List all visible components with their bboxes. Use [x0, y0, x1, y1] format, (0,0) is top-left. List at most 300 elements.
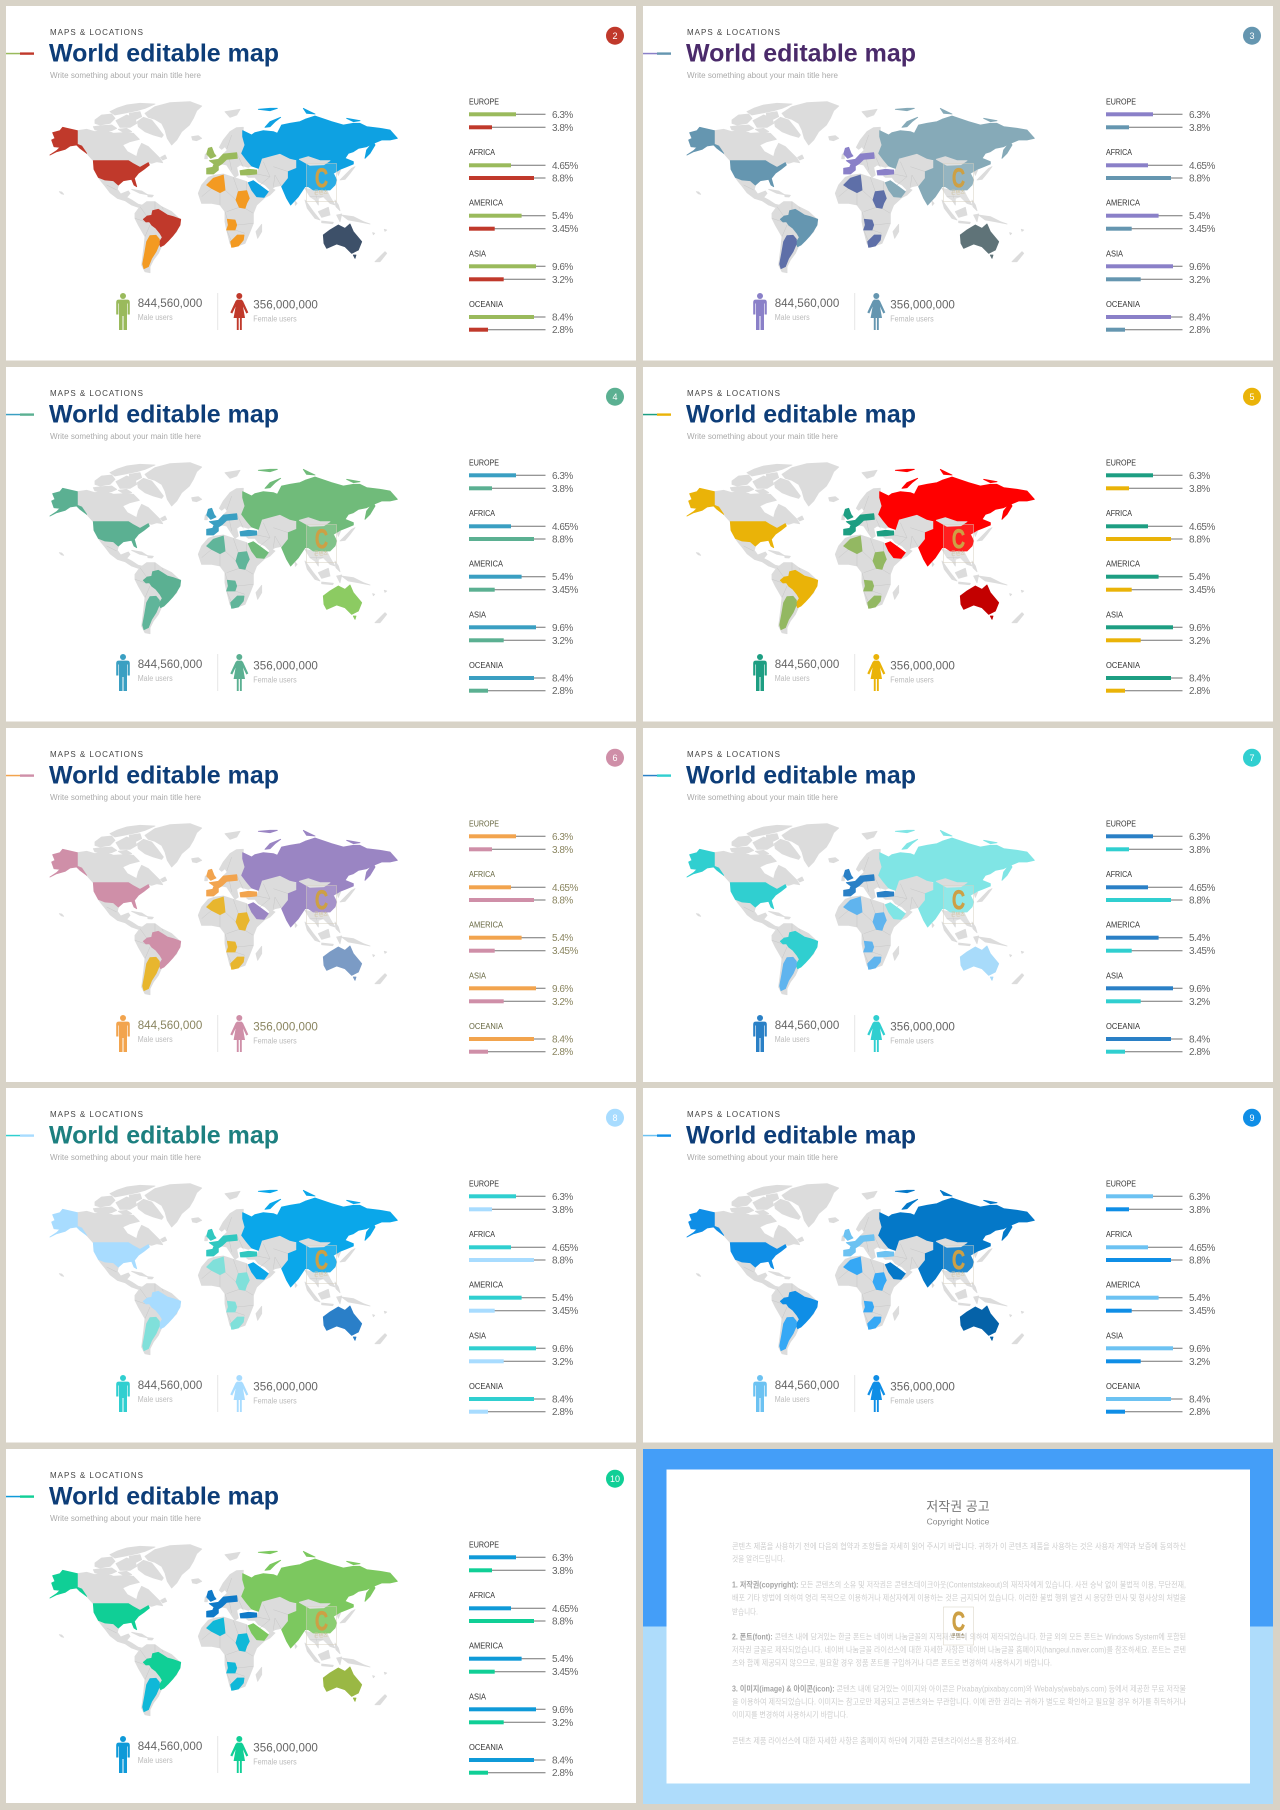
- male stat: 844,560,000: [138, 1018, 203, 1032]
- legend: Oceania: 8.4%: [1189, 312, 1210, 324]
- legend: Asia: 9.6%: [552, 623, 573, 634]
- legend: America: 5.4%: [1189, 1293, 1210, 1304]
- legend: America: 3.45%: [1189, 224, 1215, 235]
- legend: Europe: EUROPE: [469, 1180, 499, 1188]
- world map: [687, 102, 1034, 273]
- legend: Europe: 6.3%: [552, 1552, 573, 1563]
- legend: America: 3.45%: [1189, 1306, 1215, 1317]
- page badge: 6: [612, 752, 618, 762]
- page badge: 3: [1249, 31, 1255, 41]
- panel: copyright notice: [643, 1449, 1273, 1804]
- page badge: 7: [1249, 752, 1255, 762]
- legend: Africa: AFRICA: [469, 870, 496, 879]
- legend: Oceania: 2.8%: [1189, 325, 1210, 336]
- male stat: Male users: [775, 313, 810, 322]
- world map: [50, 1184, 397, 1355]
- title: World editable map: [49, 401, 279, 429]
- kicker: MAPS & LOCATIONS: [50, 28, 143, 37]
- female stat: 356,000,000: [253, 1740, 318, 1754]
- legend: America: [1106, 199, 1215, 235]
- male stat: 844,560,000: [138, 1738, 203, 1752]
- watermark: 콘텐츠: [314, 550, 328, 557]
- watermark: [306, 163, 336, 202]
- legend: Asia: 9.6%: [1189, 983, 1210, 994]
- legend: Africa: [469, 1230, 578, 1266]
- legend: Asia: ASIA: [469, 1331, 487, 1340]
- watermark: C: [952, 884, 965, 914]
- subtitle: Write something about your main title here: [687, 71, 839, 80]
- legend: Oceania: 8.4%: [1189, 1394, 1210, 1406]
- male stat: 844,560,000: [138, 296, 203, 310]
- female stat: Female users: [253, 675, 297, 684]
- female stat: 356,000,000: [890, 658, 955, 672]
- watermark: C: [952, 1606, 965, 1636]
- legend: Oceania: 8.4%: [552, 1394, 573, 1406]
- legend: Oceania: 2.8%: [1189, 1047, 1210, 1058]
- legend: Asia: [1106, 1331, 1210, 1368]
- legend: Europe: 3.8%: [552, 1205, 573, 1216]
- legend: Oceania: [469, 1382, 573, 1418]
- legend: Oceania: [469, 1021, 573, 1058]
- page badge: [606, 748, 624, 766]
- male stat: [753, 654, 840, 691]
- legend: America: [469, 560, 578, 596]
- watermark: C: [315, 884, 328, 914]
- legend: Africa: 8.8%: [1189, 895, 1210, 906]
- panel: slide 2: [6, 6, 636, 360]
- watermark: C: [952, 524, 965, 554]
- legend: Asia: [1106, 249, 1210, 286]
- page badge: 10: [610, 1473, 620, 1483]
- legend: Europe: 3.8%: [1189, 844, 1210, 855]
- legend: Africa: 4.65%: [552, 522, 578, 533]
- accent line: [6, 52, 34, 55]
- male stat: [753, 1375, 840, 1412]
- legend: America: [1106, 1281, 1215, 1317]
- watermark: 콘텐츠: [314, 189, 328, 196]
- panel: slide 4: [6, 367, 636, 722]
- accent line: [6, 774, 34, 776]
- stat divider: [217, 1014, 218, 1052]
- legend: Asia: 9.6%: [552, 1344, 573, 1355]
- legend: America: 5.4%: [1189, 572, 1210, 583]
- legend: Oceania: [469, 661, 573, 697]
- legend: Oceania: 2.8%: [1189, 1407, 1210, 1418]
- legend: Oceania: [1106, 1382, 1210, 1418]
- legend: Africa: 4.65%: [552, 1603, 578, 1614]
- legend: Asia: [1106, 610, 1210, 647]
- legend: Oceania: [1106, 1021, 1210, 1058]
- legend: Oceania: [1106, 661, 1210, 697]
- watermark: C: [315, 1245, 328, 1275]
- copyright subheading: Copyright Notice: [927, 1516, 990, 1526]
- legend: Europe: 3.8%: [552, 1565, 573, 1576]
- legend: Africa: [469, 509, 578, 546]
- legend: Asia: ASIA: [469, 610, 487, 619]
- legend: Africa: AFRICA: [469, 148, 496, 157]
- legend: America: AMERICA: [1106, 920, 1141, 929]
- male stat: Male users: [138, 674, 173, 683]
- legend: Africa: [1106, 509, 1215, 546]
- kicker: MAPS & LOCATIONS: [50, 1470, 143, 1480]
- legend: Europe: EUROPE: [1106, 1180, 1136, 1188]
- legend: Oceania: 2.8%: [552, 325, 573, 336]
- page badge: [1243, 388, 1261, 406]
- legend: Asia: [469, 971, 573, 1007]
- legend: America: 5.4%: [552, 1654, 573, 1665]
- watermark: C: [315, 1606, 328, 1636]
- legend: Africa: [1106, 1230, 1215, 1266]
- legend: Europe: [1106, 98, 1210, 134]
- legend: Africa: 8.8%: [552, 1616, 573, 1627]
- male stat: 844,560,000: [138, 1378, 203, 1392]
- copyright body: 콘텐츠 제품 라이선스에 대한 자세한 사항은 홈페이지 하단에 기재한 콘텐츠라이선스를 참조하세요.: [732, 1735, 1019, 1745]
- stat divider: [854, 654, 855, 691]
- female stat: [230, 654, 318, 691]
- legend: America: 3.45%: [552, 1667, 578, 1678]
- accent line: [643, 774, 671, 776]
- legend: Africa: [1106, 870, 1215, 906]
- legend: Oceania: OCEANIA: [1106, 1021, 1141, 1030]
- legend: [469, 1540, 578, 1779]
- watermark: C: [952, 1245, 965, 1275]
- legend: Europe: 3.8%: [1189, 1205, 1210, 1216]
- legend: Oceania: 8.4%: [552, 674, 573, 684]
- legend: Europe: EUROPE: [469, 819, 499, 828]
- legend: Africa: 4.65%: [1189, 522, 1215, 533]
- male stat: 844,560,000: [775, 1018, 840, 1032]
- legend: Asia: 3.2%: [1189, 1357, 1210, 1368]
- legend: Africa: 8.8%: [552, 1256, 573, 1266]
- accent line: [6, 413, 34, 416]
- legend: Asia: [469, 610, 573, 647]
- legend: Asia: 3.2%: [552, 275, 573, 286]
- copyright body: 콘텐츠 제품을 사용하기 전에 다음의 협약과 조항들을 자세히 읽어 주시기 바랍니다. 귀하가 이 콘텐츠 제품을 사용하는 것은 사용자 계약과 보증에 동의하신: [732, 1540, 1186, 1550]
- panel: slide 5: [643, 367, 1273, 722]
- copyright body: 2. 폰트(font): 콘텐츠 내에 담겨있는 한글 폰트는 네이버 나눔글꼴의 지적재산권에 의하여 제작되었습니다. 한글 외의 모든 폰트는 Windows System에 포함된: [732, 1631, 1186, 1641]
- female stat: Female users: [890, 1036, 934, 1045]
- legend: Africa: 4.65%: [1189, 161, 1215, 172]
- legend: [1106, 1180, 1215, 1418]
- legend: Oceania: OCEANIA: [469, 1742, 504, 1751]
- subtitle: Write something about your main title here: [50, 1153, 202, 1162]
- legend: Oceania: OCEANIA: [469, 661, 504, 670]
- legend: America: AMERICA: [1106, 1281, 1141, 1290]
- female stat: Female users: [253, 1396, 297, 1405]
- kicker: MAPS & LOCATIONS: [50, 389, 143, 398]
- watermark: [944, 884, 974, 923]
- male stat: Male users: [138, 1034, 173, 1044]
- legend: Oceania: OCEANIA: [1106, 300, 1141, 309]
- kicker: MAPS & LOCATIONS: [687, 750, 780, 758]
- legend: Oceania: 2.8%: [1189, 686, 1210, 697]
- panel: slide 9: [643, 1088, 1273, 1442]
- page badge: [1243, 27, 1261, 45]
- legend: Asia: ASIA: [1106, 1331, 1124, 1340]
- watermark: [306, 1606, 336, 1644]
- legend: Africa: 4.65%: [552, 882, 578, 893]
- legend: Europe: 6.3%: [1189, 1192, 1210, 1203]
- legend: Asia: 9.6%: [552, 1704, 573, 1715]
- female stat: Female users: [890, 1396, 934, 1405]
- watermark: [306, 884, 336, 923]
- legend: Asia: [1106, 971, 1210, 1007]
- copyright body: 츠와 함께 제공되지 않으므로, 필요할 경우 정품 폰트를 구입하거나 다른 폰트로 변경하여 사용하시기 바랍니다.: [732, 1657, 1052, 1667]
- male stat: Male users: [775, 1395, 810, 1404]
- watermark: [944, 1245, 974, 1284]
- legend: Europe: [469, 458, 573, 495]
- legend: Oceania: [1106, 300, 1210, 336]
- male stat: [116, 1736, 203, 1772]
- world map: [50, 1544, 397, 1715]
- kicker: MAPS & LOCATIONS: [50, 1110, 143, 1119]
- legend: Oceania: 2.8%: [552, 1407, 573, 1418]
- legend: Oceania: 2.8%: [552, 1768, 573, 1779]
- watermark: [306, 1245, 336, 1284]
- legend: Europe: 3.8%: [552, 123, 573, 134]
- watermark: 콘텐츠: [314, 1632, 328, 1638]
- legend: Europe: 3.8%: [1189, 123, 1210, 134]
- stat divider: [854, 1375, 855, 1412]
- legend: America: 3.45%: [552, 585, 578, 596]
- watermark: 콘텐츠: [951, 550, 965, 557]
- accent line: [643, 413, 671, 416]
- legend: Africa: AFRICA: [469, 509, 496, 518]
- legend: Asia: 3.2%: [1189, 996, 1210, 1007]
- legend: Europe: EUROPE: [469, 98, 499, 106]
- female stat: Female users: [253, 1036, 297, 1045]
- legend: Africa: 4.65%: [1189, 1243, 1215, 1254]
- legend: Oceania: 8.4%: [552, 312, 573, 324]
- stat divider: [217, 1736, 218, 1772]
- legend: America: 5.4%: [552, 211, 573, 222]
- watermark: [944, 524, 974, 562]
- legend: America: [1106, 920, 1215, 957]
- legend: America: AMERICA: [469, 1641, 504, 1650]
- female stat: [867, 654, 955, 691]
- watermark: [944, 1606, 974, 1644]
- legend: Asia: ASIA: [469, 249, 487, 258]
- legend: Oceania: 8.4%: [1189, 1034, 1210, 1045]
- legend: Oceania: OCEANIA: [1106, 1382, 1141, 1391]
- copyright body: 것을 알려드립니다.: [732, 1553, 785, 1563]
- legend: America: [469, 920, 578, 957]
- legend: America: [469, 1281, 578, 1317]
- female stat: 356,000,000: [890, 297, 955, 311]
- legend: America: [469, 1641, 578, 1678]
- legend: Africa: 4.65%: [1189, 882, 1215, 893]
- female stat: [230, 293, 318, 330]
- legend: Asia: ASIA: [469, 971, 487, 980]
- legend: Europe: [1106, 1180, 1210, 1216]
- legend: Europe: [469, 1180, 573, 1216]
- panel: slide 8: [6, 1088, 636, 1442]
- male stat: Male users: [138, 313, 173, 322]
- stat divider: [854, 1014, 855, 1052]
- world map: [50, 102, 397, 273]
- legend: America: AMERICA: [469, 199, 504, 208]
- legend: America: 5.4%: [1189, 211, 1210, 222]
- female stat: [230, 1375, 318, 1412]
- kicker: MAPS & LOCATIONS: [50, 750, 143, 758]
- panel: slide 10: [6, 1449, 636, 1803]
- legend: Africa: [1106, 148, 1215, 184]
- legend: Africa: 8.8%: [552, 895, 573, 906]
- legend: America: AMERICA: [1106, 560, 1141, 569]
- legend: [1106, 98, 1215, 336]
- legend: Europe: 6.3%: [1189, 110, 1210, 121]
- female stat: Female users: [253, 314, 297, 323]
- page badge: 2: [612, 31, 618, 41]
- legend: America: 3.45%: [552, 946, 578, 957]
- male stat: Male users: [138, 1756, 173, 1764]
- page badge: [1243, 748, 1261, 766]
- female stat: Female users: [890, 314, 934, 323]
- male stat: 844,560,000: [138, 657, 203, 671]
- female stat: 356,000,000: [253, 297, 318, 311]
- female stat: [230, 1736, 318, 1772]
- legend: [469, 819, 578, 1058]
- subtitle: Write something about your main title here: [687, 1153, 839, 1162]
- stat divider: [854, 293, 855, 330]
- male stat: [116, 1014, 203, 1052]
- legend: America: 3.45%: [1189, 946, 1215, 957]
- female stat: 356,000,000: [890, 1019, 955, 1033]
- legend: Asia: ASIA: [1106, 610, 1124, 619]
- legend: Oceania: OCEANIA: [469, 300, 504, 309]
- watermark: C: [315, 524, 328, 554]
- legend: Africa: [469, 870, 578, 906]
- copyright body: 저작권 글꼴로 제작되었습니다. 네이버 나눔글꼴 라이선스에 대한 자세한 사항은 네이버 나눔글꼴 홈페이지(hangeul.naver.com)를 참조하세요. 폰트는 콘텐: [732, 1644, 1186, 1654]
- legend: [469, 1180, 578, 1418]
- female stat: 356,000,000: [253, 1019, 318, 1033]
- male stat: [116, 1375, 203, 1412]
- legend: America: AMERICA: [469, 560, 504, 569]
- legend: Europe: EUROPE: [1106, 98, 1136, 106]
- legend: Europe: 6.3%: [552, 471, 573, 482]
- legend: Asia: 9.6%: [1189, 623, 1210, 634]
- title: World editable map: [686, 40, 916, 68]
- male stat: 844,560,000: [775, 296, 840, 310]
- copyright body: 3. 이미지(image) & 아이콘(icon): 콘텐츠 내에 담겨있는 이미지와 아이콘은 Pixabay(pixabay.com)와 Webalys(webalys.com) 등에서 제공한 무료 저작물: [732, 1683, 1186, 1693]
- watermark: 콘텐츠: [314, 910, 328, 918]
- legend: Europe: 6.3%: [552, 110, 573, 121]
- legend: America: 3.45%: [1189, 585, 1215, 596]
- male stat: 844,560,000: [775, 1378, 840, 1392]
- legend: Oceania: OCEANIA: [469, 1021, 504, 1030]
- copyright body: 받습니다.: [732, 1606, 758, 1616]
- legend: Oceania: OCEANIA: [1106, 661, 1141, 670]
- legend: Africa: [469, 1591, 578, 1627]
- female stat: 356,000,000: [253, 1379, 318, 1393]
- legend: America: AMERICA: [1106, 199, 1141, 208]
- page badge: 8: [612, 1113, 618, 1123]
- legend: Europe: EUROPE: [469, 458, 499, 468]
- female stat: [867, 1014, 955, 1052]
- legend: Oceania: [469, 300, 573, 336]
- copyright body: 1. 저작권(copyright): 모든 콘텐츠의 소유 및 저작권은 콘텐츠테이크아웃(Contentstakeout)의 재작자에게 있습니다. 사전 승낙 없이 불법적 이용, 무단전재,: [732, 1579, 1186, 1589]
- legend: Oceania: 8.4%: [552, 1755, 573, 1766]
- legend: America: 5.4%: [552, 572, 573, 583]
- legend: Oceania: 2.8%: [552, 686, 573, 697]
- legend: Europe: 6.3%: [552, 831, 573, 842]
- title: World editable map: [686, 401, 916, 429]
- watermark: 콘텐츠: [951, 1271, 965, 1278]
- panel: slide 6: [6, 728, 636, 1082]
- panel: slide 7: [643, 728, 1273, 1082]
- legend: Asia: 3.2%: [552, 1717, 573, 1728]
- legend: Africa: 8.8%: [1189, 174, 1210, 184]
- legend: America: AMERICA: [469, 920, 504, 929]
- watermark: [944, 163, 974, 202]
- subtitle: Write something about your main title here: [50, 1514, 202, 1522]
- legend: [1106, 819, 1215, 1058]
- page badge: [606, 388, 624, 406]
- legend: America: [469, 199, 578, 235]
- female stat: [230, 1014, 318, 1052]
- stat divider: [217, 654, 218, 691]
- accent line: [6, 1134, 34, 1137]
- subtitle: Write something about your main title here: [50, 792, 202, 802]
- title: World editable map: [49, 761, 279, 789]
- legend: Europe: [469, 98, 573, 134]
- legend: Africa: 4.65%: [552, 161, 578, 172]
- legend: Africa: 8.8%: [552, 174, 573, 184]
- watermark: C: [315, 163, 328, 193]
- legend: Oceania: 8.4%: [1189, 674, 1210, 684]
- legend: Asia: [469, 249, 573, 286]
- watermark: 콘텐츠: [951, 910, 965, 918]
- legend: Oceania: 8.4%: [552, 1034, 573, 1045]
- page badge: 5: [1249, 392, 1255, 402]
- watermark: C: [952, 163, 965, 193]
- kicker: MAPS & LOCATIONS: [687, 28, 780, 37]
- title: World editable map: [49, 1482, 279, 1510]
- copyright body: 배포 기타 방법에 의하여 영리 목적으로 이용하거나 제삼자에게 이용하는 것은 금지되어 있습니다. 이러한 불법 행위 발견 시 응당한 민사 및 형사상의 처벌을: [732, 1592, 1186, 1602]
- legend: [469, 98, 578, 336]
- watermark: 콘텐츠: [951, 189, 965, 196]
- world map: [50, 463, 397, 634]
- legend: Europe: 3.8%: [1189, 484, 1210, 495]
- legend: Europe: 3.8%: [552, 844, 573, 855]
- legend: Africa: 8.8%: [552, 534, 573, 546]
- page badge: 9: [1249, 1113, 1255, 1123]
- title: World editable map: [686, 761, 916, 789]
- legend: Europe: [469, 819, 573, 855]
- legend: America: 5.4%: [1189, 933, 1210, 944]
- title: World editable map: [49, 40, 279, 68]
- page badge: [606, 27, 624, 45]
- legend: Africa: [469, 148, 578, 184]
- male stat: [753, 293, 840, 330]
- legend: Asia: ASIA: [1106, 971, 1124, 980]
- male stat: Male users: [138, 1395, 173, 1404]
- legend: Africa: AFRICA: [1106, 509, 1133, 518]
- panel: slide 3: [643, 6, 1273, 360]
- watermark: 콘텐츠: [314, 1271, 328, 1278]
- world map: [687, 823, 1034, 994]
- page badge: 4: [612, 392, 618, 402]
- legend: Asia: 9.6%: [1189, 1344, 1210, 1355]
- subtitle: Write something about your main title here: [687, 792, 839, 802]
- title: World editable map: [49, 1122, 279, 1150]
- accent line: [6, 1495, 34, 1497]
- legend: Oceania: OCEANIA: [469, 1382, 504, 1391]
- page badge: [1243, 1109, 1261, 1127]
- female stat: Female users: [890, 675, 934, 684]
- legend: Africa: 4.65%: [552, 1243, 578, 1254]
- legend: Africa: AFRICA: [469, 1230, 496, 1239]
